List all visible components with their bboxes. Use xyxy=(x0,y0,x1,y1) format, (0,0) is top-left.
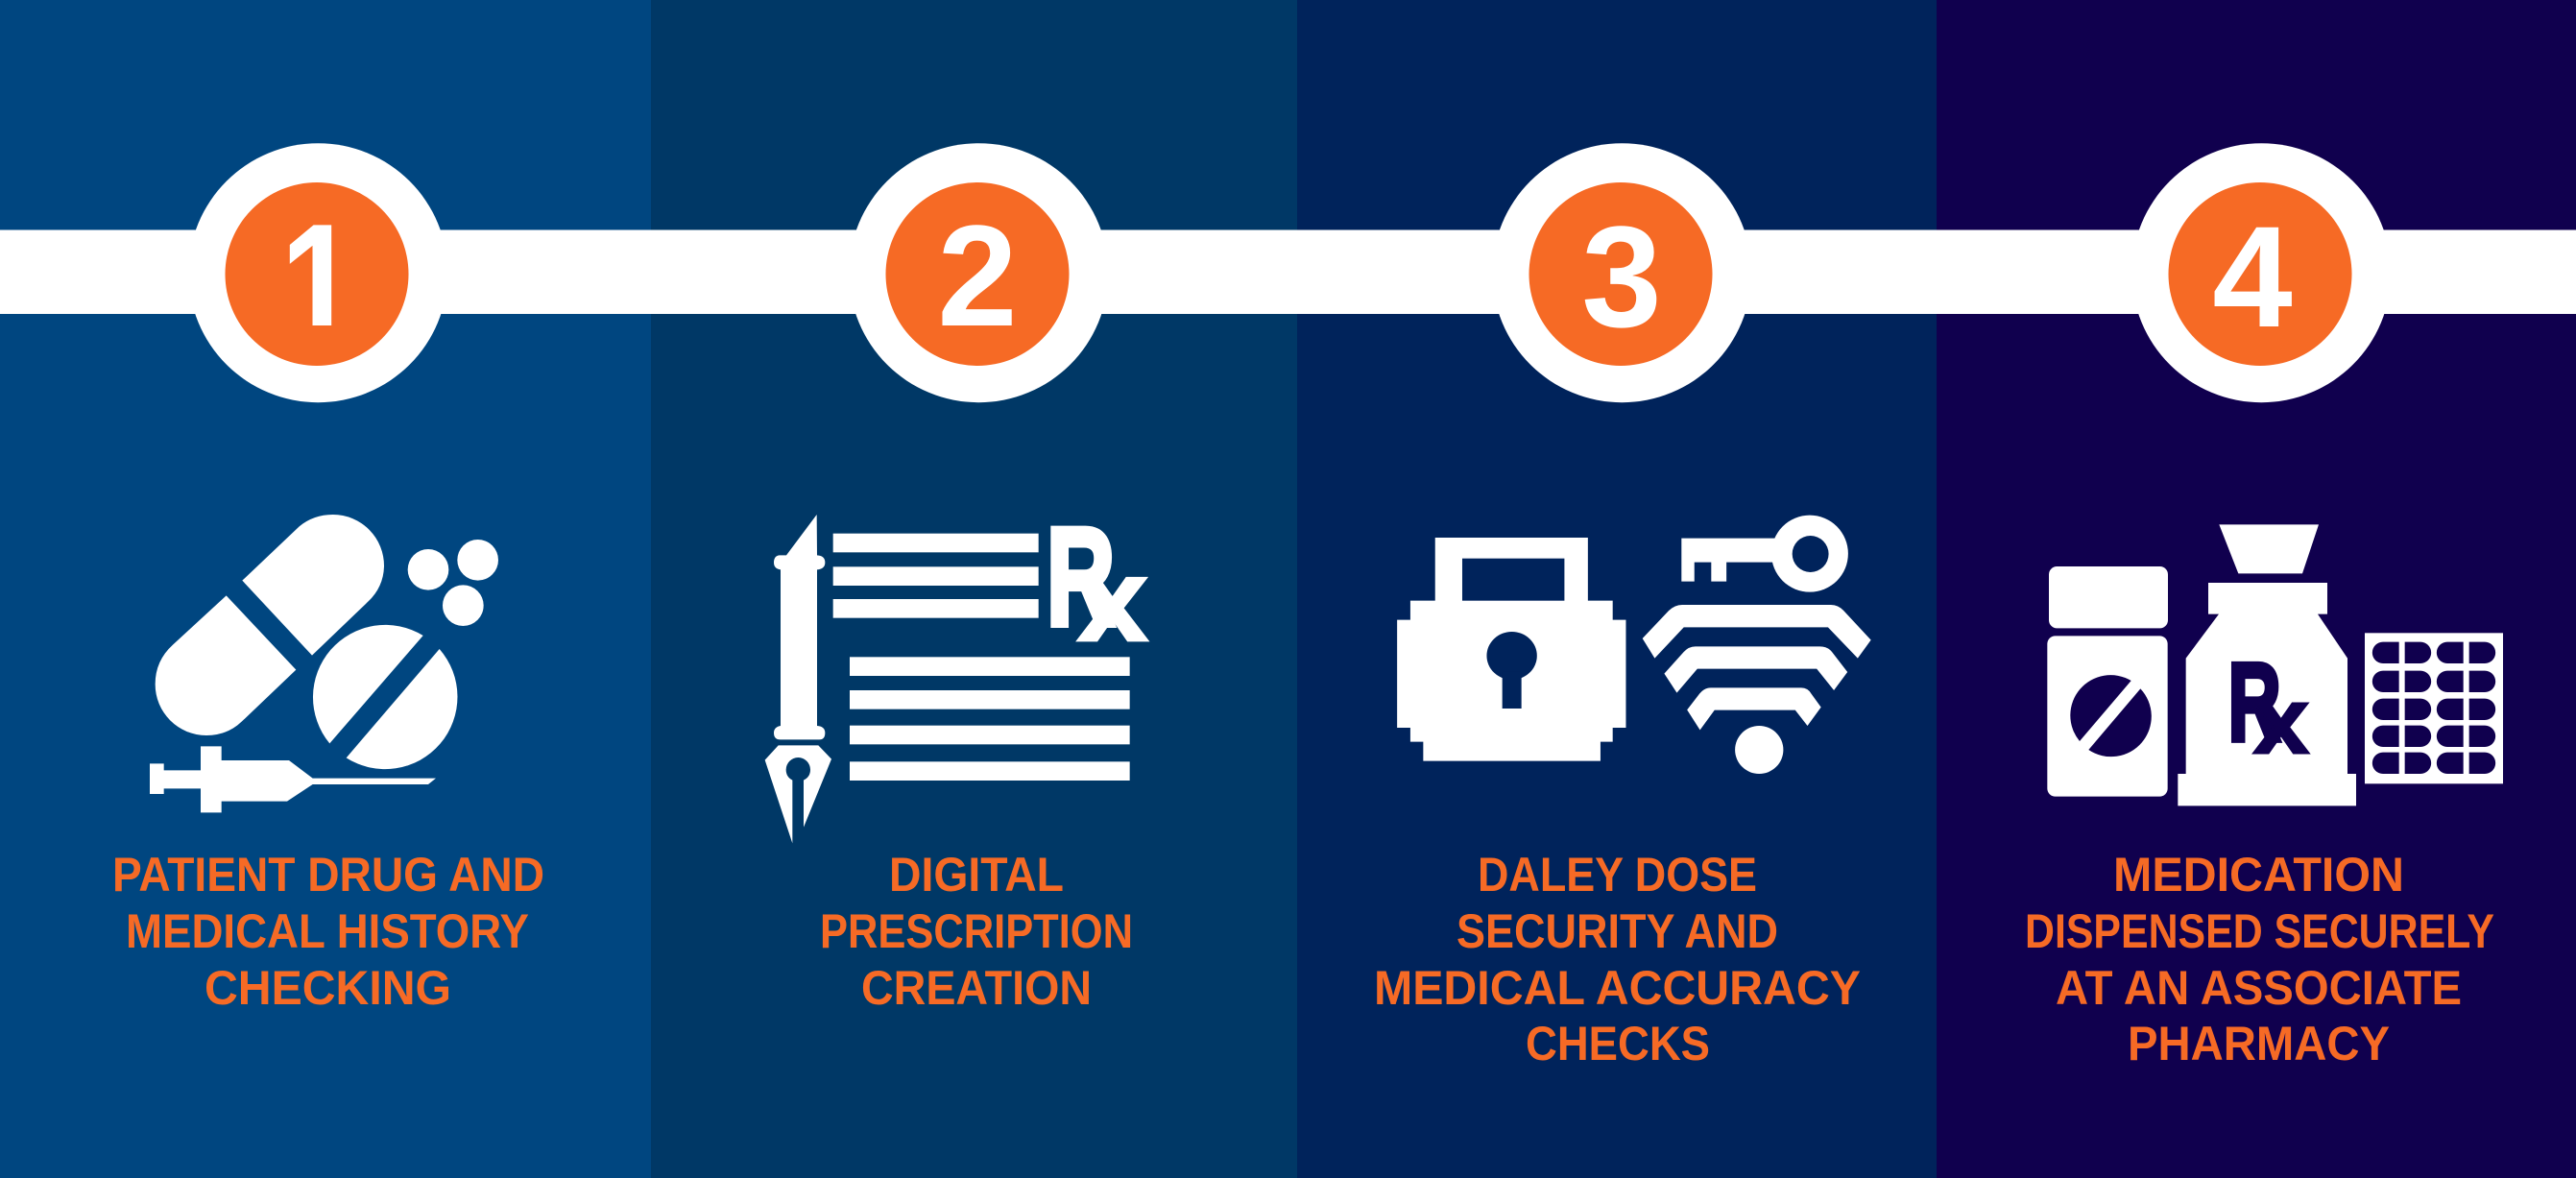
panel: step 4 medication dispensed xyxy=(1937,0,2576,1178)
caption: step 3: DALEY DOSE xyxy=(1478,848,1757,902)
caption: step 1: CHECKING xyxy=(205,961,451,1015)
icon: pill bottle, prescription bottle and blister pack xyxy=(2047,524,2503,805)
caption: step 3: SECURITY AND xyxy=(1457,904,1778,958)
caption: step 4: AT AN ASSOCIATE xyxy=(2056,961,2462,1015)
panel background 4 xyxy=(1937,0,2576,1178)
timeline bar segment 1 xyxy=(0,230,651,314)
step badge 3: 3 xyxy=(1581,196,1662,357)
icon: capsule, tablet, pills and syringe xyxy=(150,515,498,812)
step badge 3 xyxy=(1492,143,1751,402)
icon: fountain pen and prescription lines: R xyxy=(1047,500,1115,655)
timeline bar segment 2 xyxy=(651,230,1297,314)
panel background 3 xyxy=(1297,0,1937,1178)
caption: step 3: MEDICAL ACCURACY xyxy=(1374,961,1861,1015)
timeline bar segment 3 xyxy=(1297,230,1937,314)
caption: step 3 xyxy=(1374,848,1861,1070)
icon: fountain pen and prescription lines xyxy=(765,500,1148,843)
icon: padlock, key and wifi signal xyxy=(1397,516,1871,774)
step badge 4 xyxy=(2131,143,2391,402)
step badge 2 xyxy=(849,143,1108,402)
timeline bar segment 4 xyxy=(1937,230,2576,314)
step badge 2: 2 xyxy=(937,195,1018,356)
caption: step 1: PATIENT DRUG AND xyxy=(112,848,544,902)
caption: step 2: DIGITAL xyxy=(889,848,1064,902)
panel: step 3 security checks xyxy=(1297,0,1937,1178)
panel background 1 xyxy=(0,0,651,1178)
caption: step 4 xyxy=(2025,848,2494,1070)
caption: step 2 xyxy=(820,848,1133,1015)
caption: step 1: MEDICAL HISTORY xyxy=(126,904,529,958)
caption: step 4: PHARMACY xyxy=(2128,1017,2390,1070)
step badge 4: 4 xyxy=(2212,196,2293,357)
caption: step 1 xyxy=(112,848,544,1015)
icon: pill bottle, prescription bottle and blister pack: x xyxy=(2252,667,2309,774)
caption: step 3: CHECKS xyxy=(1526,1017,1710,1070)
caption: step 2: CREATION xyxy=(861,961,1092,1015)
caption: step 4: DISPENSED SECURELY xyxy=(2025,904,2494,958)
panel: step 1 patient history xyxy=(0,0,651,1178)
icon: pill bottle, prescription bottle and blister pack: R xyxy=(2228,639,2281,764)
panel background 2 xyxy=(651,0,1297,1178)
caption: step 4: MEDICATION xyxy=(2113,848,2404,902)
icon: fountain pen and prescription lines: x xyxy=(1077,535,1148,666)
step badge 1: 1 xyxy=(280,187,357,384)
caption: step 2: PRESCRIPTION xyxy=(820,904,1133,958)
panel: step 2 digital prescription xyxy=(651,0,1297,1178)
step badge 1 xyxy=(188,143,447,402)
